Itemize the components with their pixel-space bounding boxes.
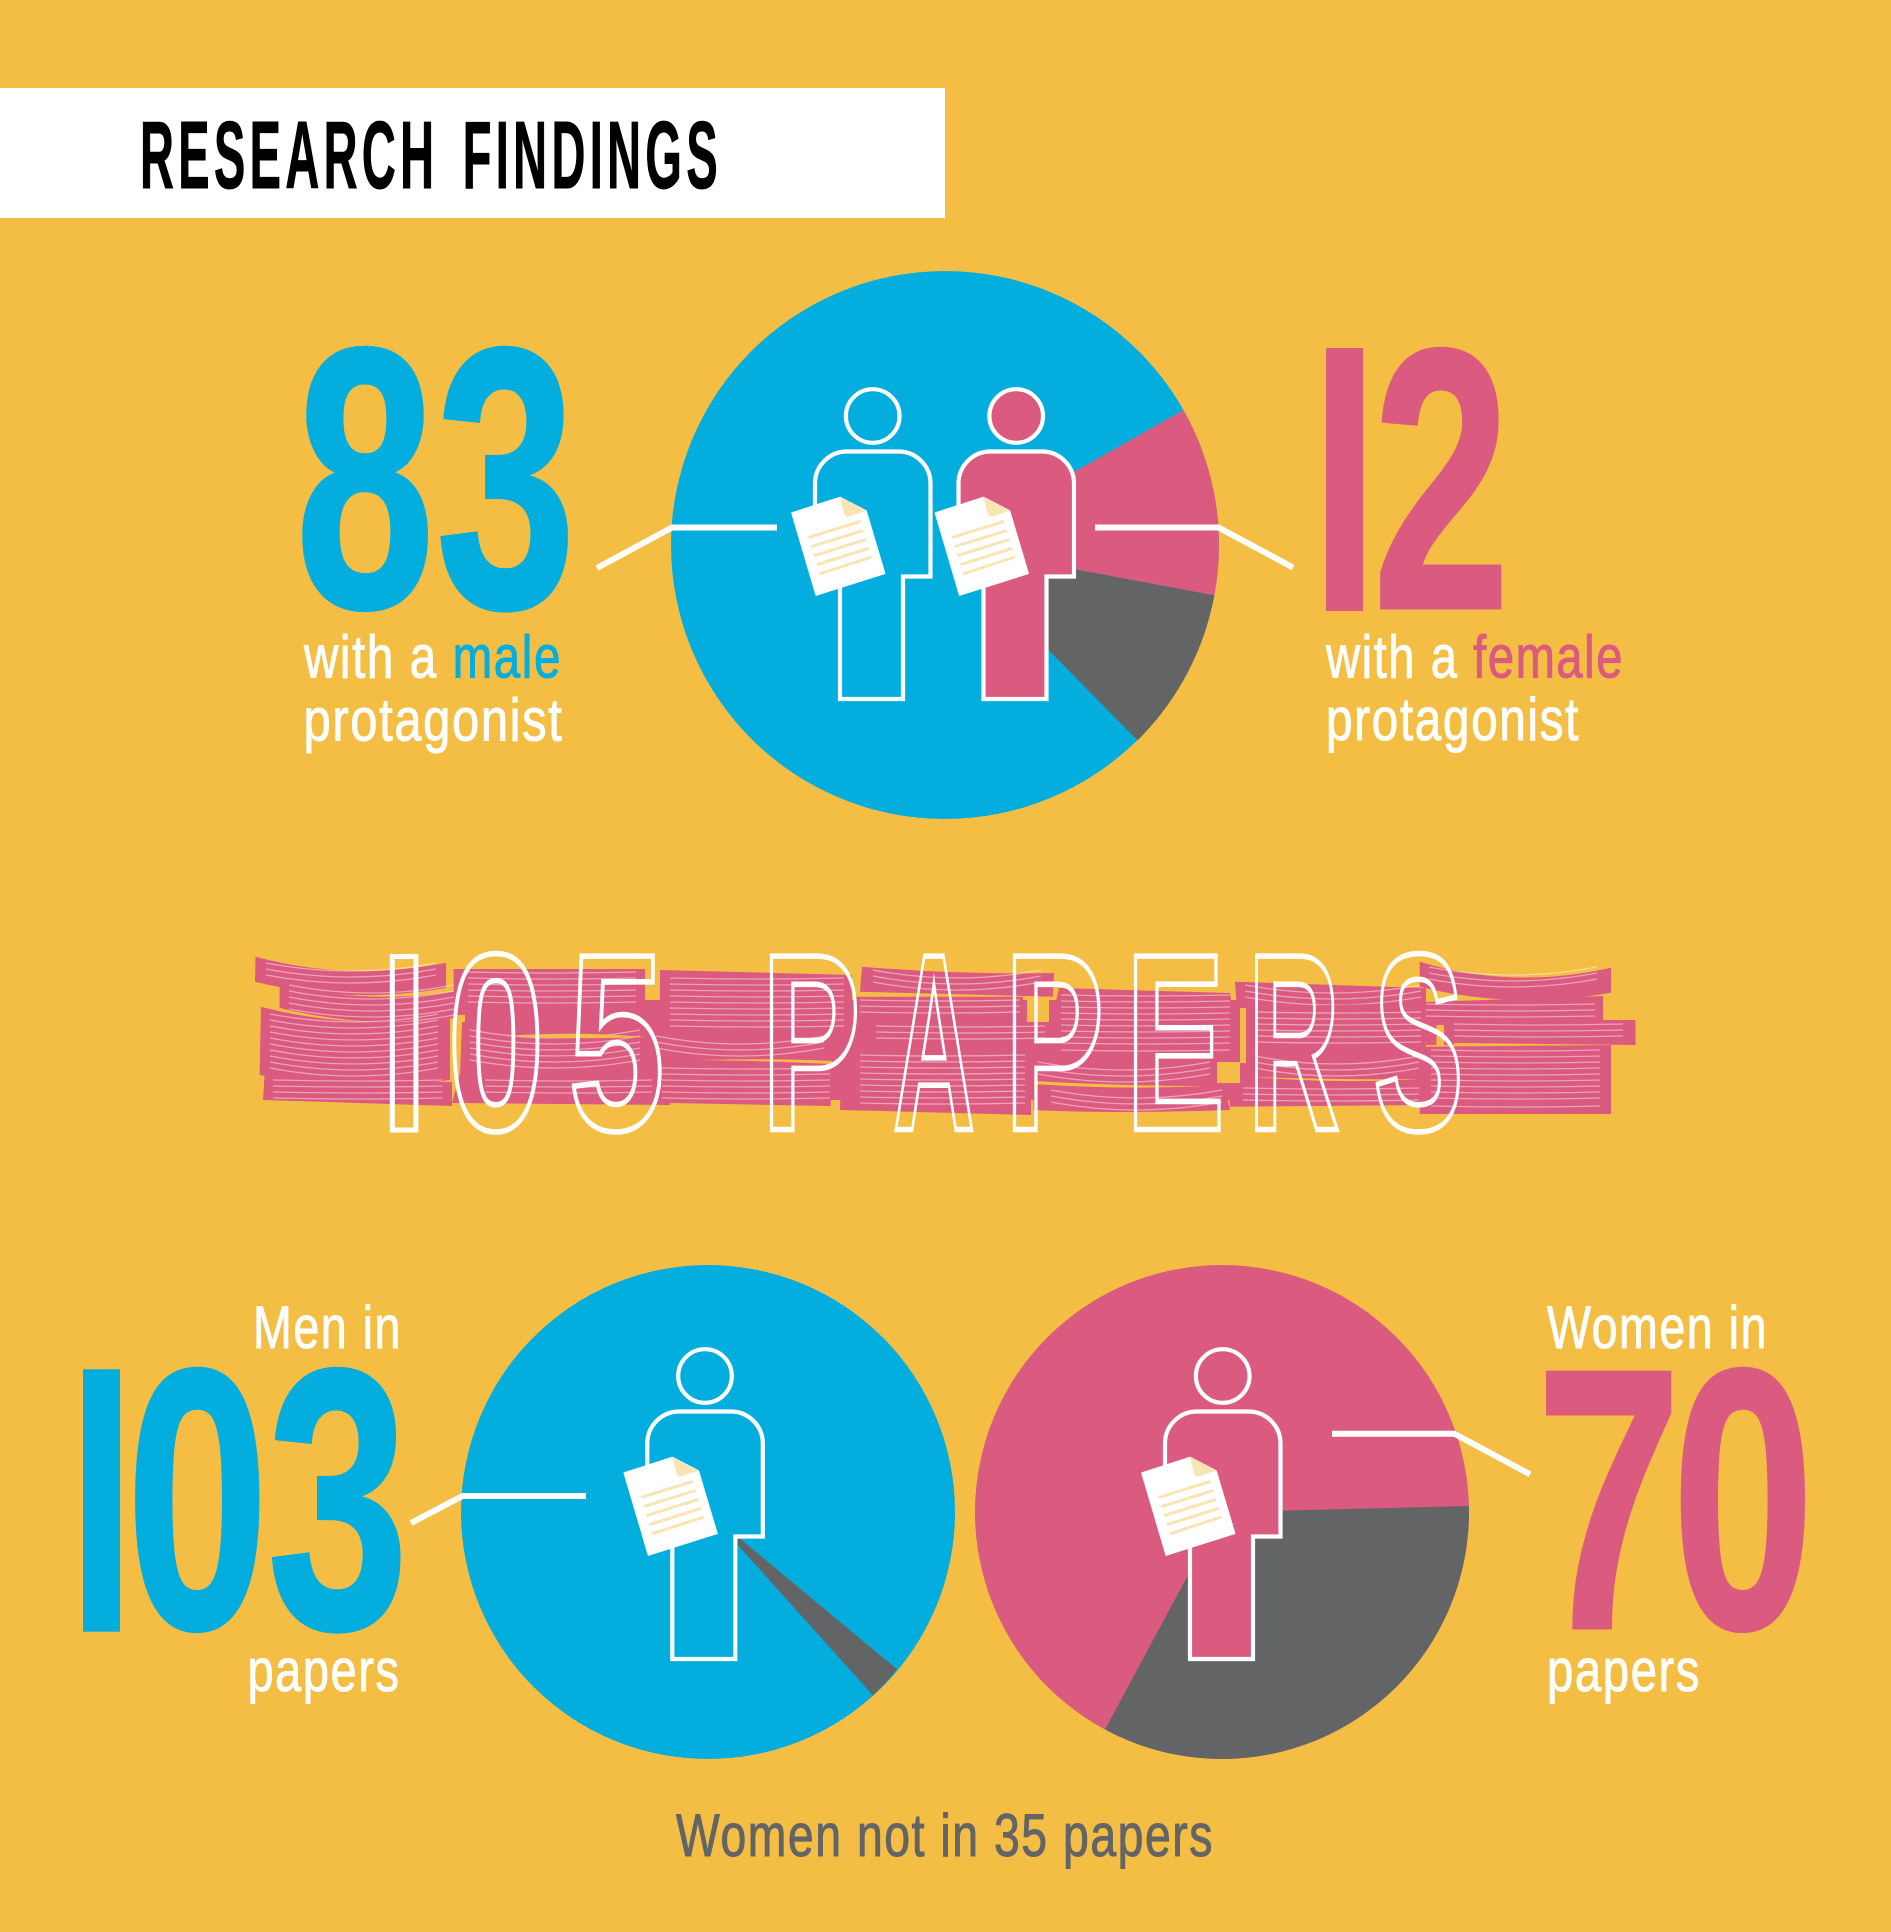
pie chart: men in papers xyxy=(461,1265,955,1759)
number: 103 xyxy=(80,1291,409,1707)
number: 103: 1 xyxy=(80,1291,118,1707)
label: Women in: Women in xyxy=(1547,1294,1768,1361)
number: 12: 1 xyxy=(1323,271,1361,687)
heading: 105 PAPERS outlined xyxy=(392,902,1464,1184)
number: 103: 0 xyxy=(126,1291,269,1707)
pie chart: protagonist gender xyxy=(671,271,1219,819)
label: Men in: Men in xyxy=(253,1294,402,1361)
pie chart: women in papers xyxy=(975,1265,1469,1759)
callout line: female xyxy=(1095,528,1293,568)
icon: male figure holding paper xyxy=(624,1349,763,1659)
number: 70: 7 xyxy=(1536,1291,1682,1707)
heading: 105 PAPERS outlined: S xyxy=(1373,902,1464,1184)
label: with a male protagonist: with a male xyxy=(303,624,562,690)
icon: male figure holding paper xyxy=(792,389,930,699)
label: papers (men): papers xyxy=(248,1637,400,1704)
number: 83: 8 xyxy=(295,270,435,686)
label: with a female protagonist: protagonist xyxy=(1326,686,1580,753)
callout line: men xyxy=(411,1496,586,1523)
heading: 105 PAPERS outlined: 5 xyxy=(568,902,665,1184)
number: 70: 0 xyxy=(1672,1291,1814,1707)
title banner: RESEARCH FINDINGS xyxy=(140,102,722,209)
label: with a male protagonist: protagonist xyxy=(304,686,564,754)
number: 83: 3 xyxy=(436,270,576,686)
heading: 105 PAPERS outlined: A xyxy=(893,902,975,1184)
callout line: women xyxy=(1332,1434,1530,1474)
number: 103: 3 xyxy=(267,1291,409,1707)
callout line: male xyxy=(597,528,777,568)
number: 12: 2 xyxy=(1373,271,1510,687)
heading: 105 PAPERS outlined: P xyxy=(762,902,860,1184)
heading: 105 PAPERS outlined: 0 xyxy=(447,902,545,1184)
label: with a female protagonist: with a female xyxy=(1325,624,1624,690)
icon: female figure holding paper xyxy=(936,389,1074,699)
label: with a female protagonist xyxy=(1325,624,1624,753)
label: with a male protagonist xyxy=(303,624,564,754)
icon: female figure holding paper xyxy=(1142,1349,1280,1659)
label: papers (women): papers xyxy=(1547,1637,1701,1704)
heading: 105 PAPERS outlined: R xyxy=(1248,902,1340,1184)
heading: 105 PAPERS outlined: P xyxy=(1004,902,1104,1184)
title banner xyxy=(0,88,945,218)
paper stack band xyxy=(255,957,1636,1115)
heading: 105 PAPERS outlined: E xyxy=(1126,902,1225,1184)
label: Women not in 35 papers: Women not in 35 papers xyxy=(676,1802,1214,1869)
